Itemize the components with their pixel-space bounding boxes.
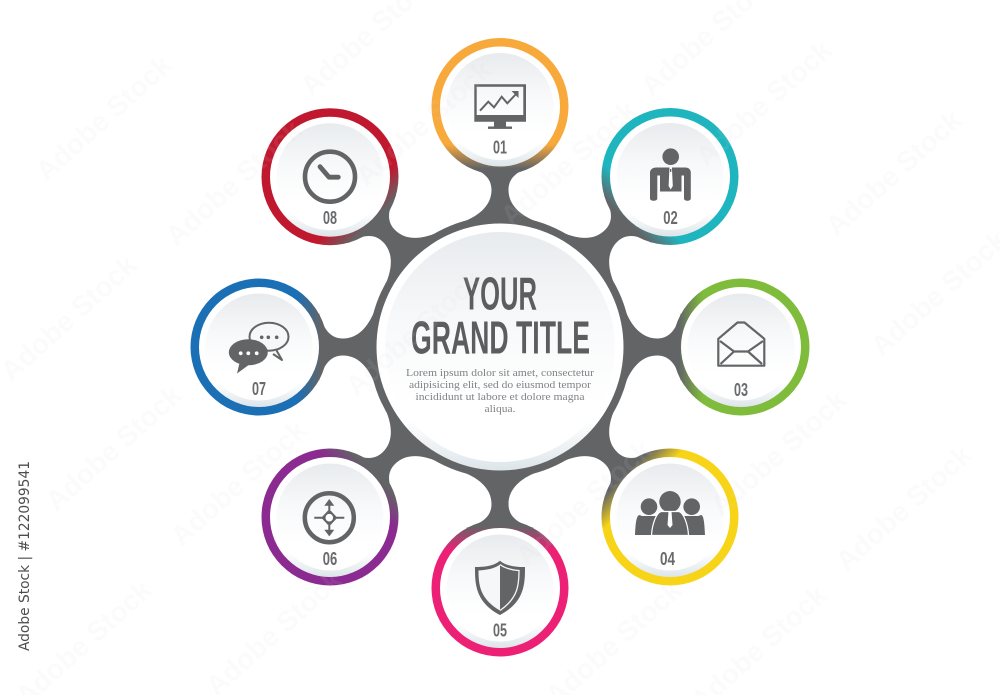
icon: shield	[475, 561, 525, 615]
watermark: Adobe Stock	[510, 434, 658, 572]
icon: business person	[650, 148, 691, 201]
watermark: Adobe Stock	[830, 439, 978, 577]
stock id label: Adobe Stock | #122099541	[17, 461, 33, 651]
node 01: orange	[432, 38, 568, 175]
icon: group of people	[635, 491, 705, 536]
watermark: Adobe Stock	[340, 264, 488, 402]
node 07: blue	[190, 278, 328, 416]
watermark: Adobe Stock	[690, 34, 838, 172]
hub and connectors	[319, 166, 681, 528]
body text: Lorem ipsum dolor sit amet, consectetur	[406, 368, 595, 379]
body text: incididunt ut labore et dolore magna	[416, 392, 585, 403]
icon: compass	[305, 493, 354, 542]
number 04: 04	[660, 549, 675, 569]
number 03: 03	[734, 380, 748, 400]
node 02: teal	[573, 80, 767, 273]
icon: open envelope	[718, 322, 764, 366]
number 05: 05	[493, 620, 507, 640]
icon: monitor with rising chart	[474, 84, 526, 129]
title: GRAND TITLE	[411, 312, 590, 364]
node 05: pink	[432, 520, 568, 656]
node 03: green	[672, 278, 810, 416]
watermark: Adobe Stock	[350, 54, 498, 192]
watermark: Adobe Stock	[495, 94, 643, 232]
number 01: 01	[493, 138, 507, 158]
node 06: purple	[233, 420, 427, 614]
icon: speech bubbles	[229, 323, 288, 374]
watermark: Adobe Stock	[165, 414, 313, 552]
watermark: Adobe Stock	[40, 379, 188, 517]
icon: clock	[305, 152, 355, 202]
title: YOUR	[463, 268, 537, 320]
watermark: Adobe Stock	[30, 49, 178, 187]
body text	[406, 368, 595, 415]
watermark: Adobe Stock	[820, 104, 968, 242]
central disc	[376, 224, 624, 470]
node 08: red	[233, 80, 427, 274]
body text: adipisicing elit, sed do eiusmod tempor	[409, 380, 592, 391]
title	[411, 268, 590, 364]
watermark: Adobe Stock	[705, 384, 853, 522]
number 02: 02	[663, 208, 678, 228]
node 04: yellow	[573, 420, 767, 614]
number 07: 07	[252, 379, 266, 399]
body text: aliqua.	[484, 404, 516, 415]
number 08: 08	[323, 208, 337, 228]
watermark: Adobe Stock	[160, 114, 308, 252]
number 06: 06	[323, 549, 337, 569]
